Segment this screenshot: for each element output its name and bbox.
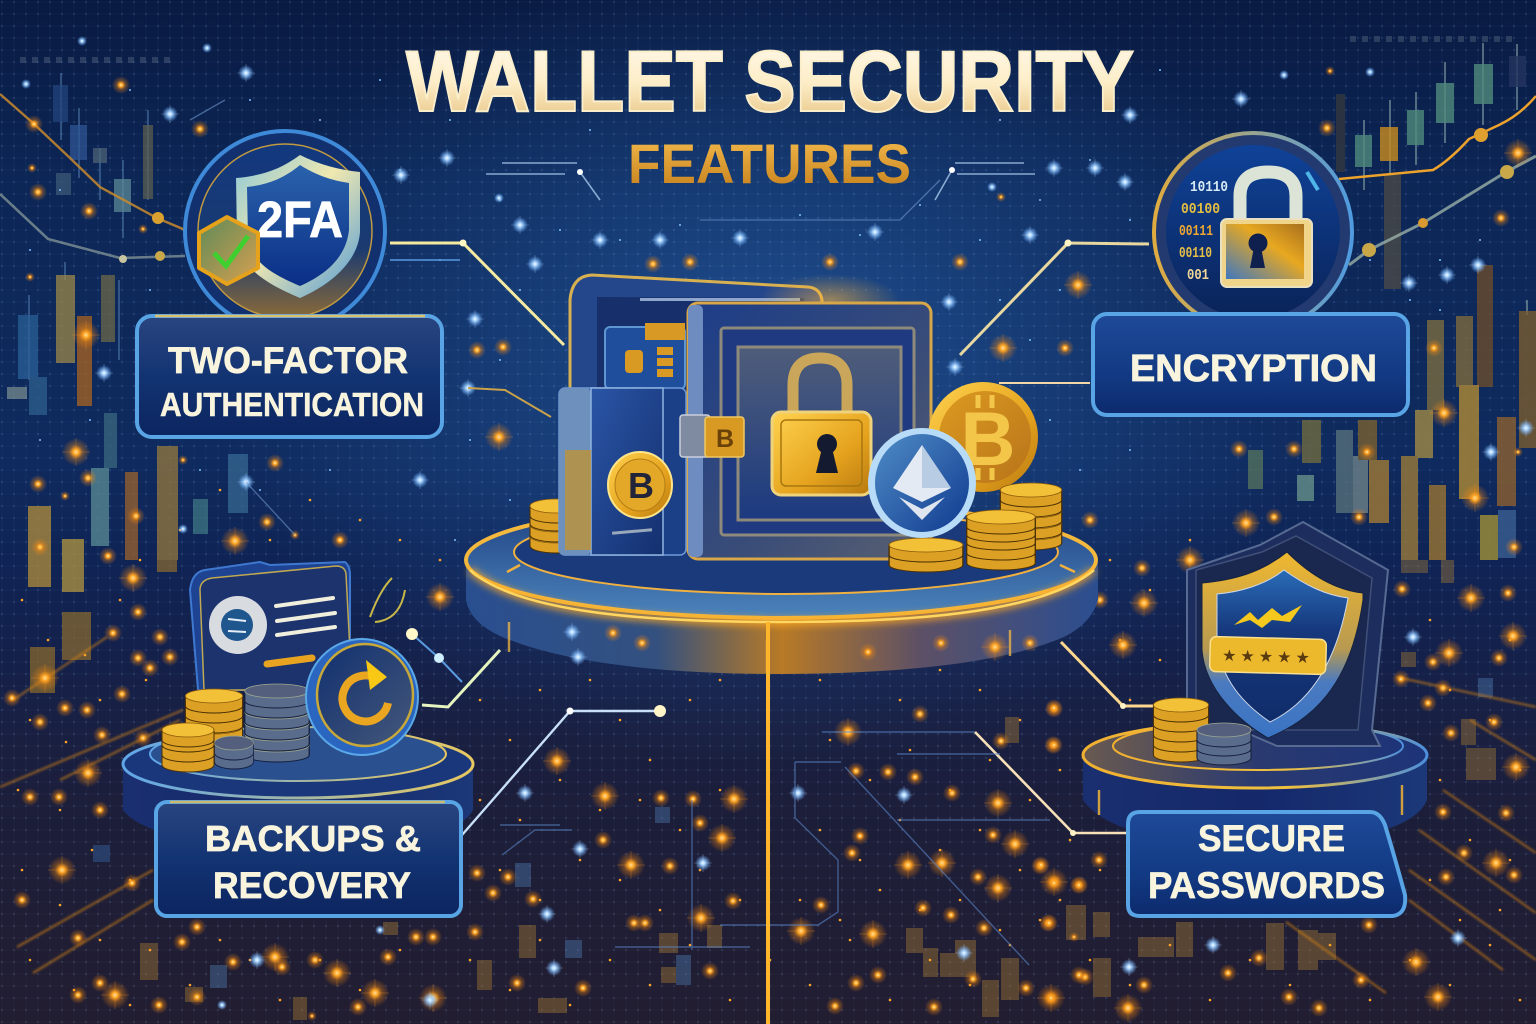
icon: backup document and restore: [162, 562, 418, 772]
binary digits: 00100: [1181, 201, 1220, 218]
binary digits: 001: [1187, 267, 1209, 284]
central lower sparkles: [499, 700, 1094, 1016]
coin stack: left: [530, 499, 582, 553]
left lower sparkles: [3, 564, 502, 1021]
binary digits: [1179, 179, 1228, 284]
panel: encryption: [1093, 314, 1408, 415]
wallet back panel: [570, 275, 822, 545]
binary digits: 00110: [1179, 245, 1212, 262]
coin: bitcoin large: B: [961, 397, 1015, 482]
panel: secure passwords: PASSWORDS: [1148, 865, 1385, 906]
translucent data blocks: [140, 560, 1496, 1020]
backups pedestal: [123, 727, 473, 836]
upper sparkles: [21, 36, 1535, 609]
subheading: features: FEATURES: [628, 132, 911, 195]
icon: password shield: ★★★★★: [1222, 646, 1314, 667]
coin: bitcoin large: [928, 382, 1038, 492]
icon: padlock: [772, 358, 871, 495]
padlock: [1221, 172, 1312, 287]
wallet clasp: B: [716, 425, 734, 453]
coin: bitcoin small: [608, 452, 672, 518]
central light beam: [761, 622, 775, 1024]
title: [406, 34, 1134, 195]
coin: bitcoin small: B: [628, 465, 654, 506]
chart trend lines: [0, 39, 1536, 265]
safe door: [688, 274, 931, 559]
central wallet and lock illustration: [530, 274, 1062, 572]
heading: wallet security: WALLET SECURITY: [406, 34, 1134, 130]
coin stacks: [162, 684, 309, 772]
icon: restore arrow: [306, 639, 418, 755]
panel: two-factor authentication: [137, 316, 442, 437]
right lower sparkles: [1032, 559, 1530, 1022]
panel: backups and recovery: [156, 802, 461, 916]
wallet front: [559, 388, 686, 555]
icon: 2FA shield medallion: [185, 131, 385, 331]
coin stacks: [1153, 698, 1251, 765]
icon: 2FA shield medallion: 2FA: [257, 191, 343, 248]
secure passwords pedestal: [1083, 722, 1427, 830]
panel: two-factor authentication: TWO-FACTOR: [168, 340, 408, 381]
candlestick chart: right: [1248, 43, 1536, 560]
panel: encryption: ENCRYPTION: [1130, 348, 1377, 390]
wallet clasp: [680, 415, 744, 457]
circuit connector lines: [190, 100, 1153, 965]
candlestick chart: left: [7, 73, 248, 862]
panel: backups and recovery: BACKUPS &: [205, 818, 421, 859]
panel: secure passwords: [1128, 812, 1405, 916]
binary digits: 10110: [1190, 179, 1228, 196]
panel: two-factor authentication: AUTHENTICATION: [160, 386, 424, 423]
central pedestal: [466, 502, 1098, 674]
coin stacks: [889, 483, 1062, 572]
icon: verified badge: [199, 217, 258, 284]
icon: encryption padlock medallion: [1154, 133, 1352, 331]
panel: backups and recovery: RECOVERY: [213, 865, 411, 906]
panel: secure passwords: SECURE: [1198, 818, 1345, 859]
orange data streaks: [0, 637, 1536, 993]
binary digits: 00111: [1179, 223, 1213, 240]
icon: password shield: [1153, 522, 1388, 765]
coin: ethereum: [868, 428, 976, 538]
